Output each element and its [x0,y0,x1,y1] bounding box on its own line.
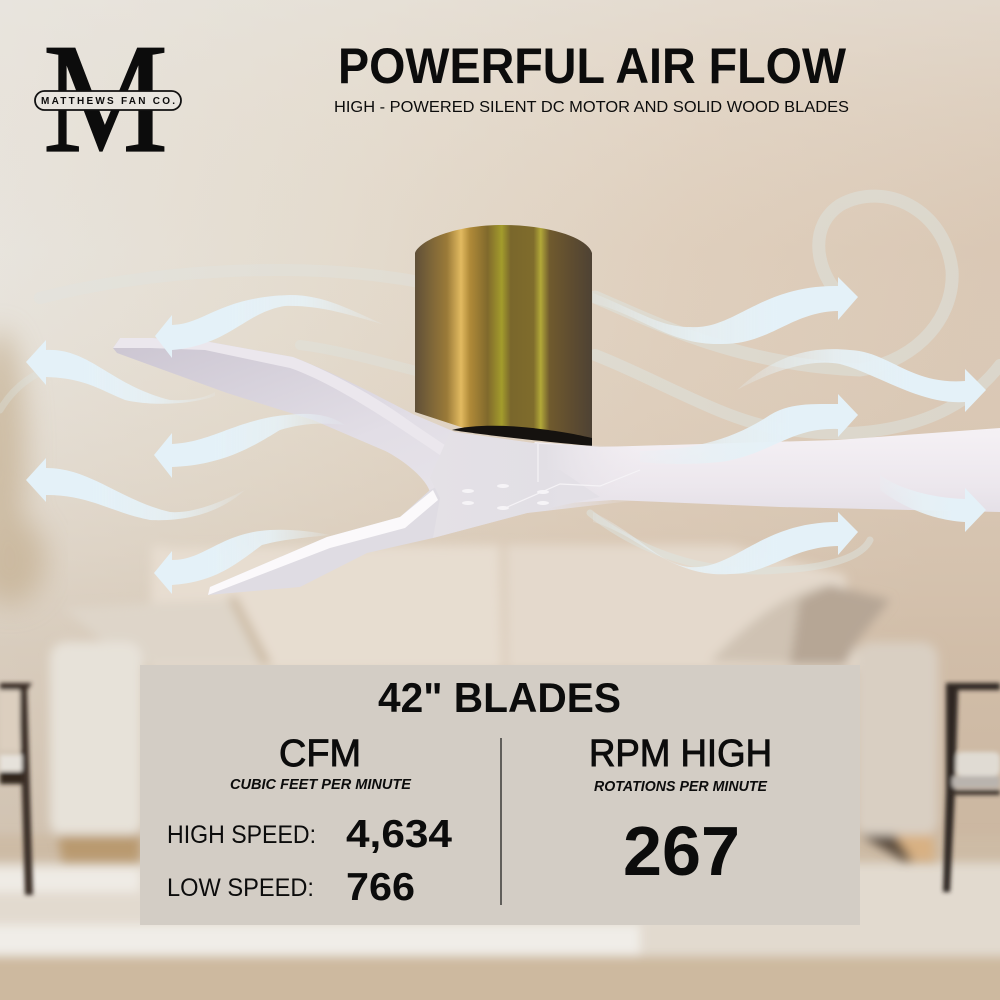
panel heading: 42" BLADES [378,674,621,721]
arrow [154,530,330,594]
blade: right [500,428,1000,512]
sofa [50,545,938,861]
arrow [880,475,986,532]
arrow [737,349,986,412]
low speed value: 766 [346,866,415,909]
low speed label: LOW SPEED: [167,874,314,902]
airflow arrows: left [26,295,385,594]
subtitle: HIGH - POWERED SILENT DC MOTOR AND SOLID WOOD BLADES [334,99,849,116]
airflow arrows: right [593,277,986,574]
hub seam [505,444,640,508]
logo: Matthews Fan Co.: M [43,11,168,185]
motor underside shadow [452,426,592,446]
arrow [640,394,858,464]
floor [0,835,1000,1000]
hub screws [462,484,549,510]
CFM subheading: CUBIC FEET PER MINUTE [230,777,412,793]
RPM heading: RPM HIGH [589,733,772,775]
arrow [26,458,245,520]
logo: Matthews Fan Co.: MATTHEWS FAN CO. [41,96,175,107]
RPM value: 267 [623,812,740,890]
title: POWERFUL AIR FLOW [338,38,847,94]
arrow [26,340,215,404]
blade: upper left [113,338,545,500]
arrow [593,277,858,344]
blade top lip [113,338,470,470]
high speed value: 4,634 [346,813,452,856]
high speed label: HIGH SPEED: [167,821,316,849]
RPM subheading: ROTATIONS PER MINUTE [594,779,768,795]
arrow [154,414,345,478]
motor housing: brass [415,225,592,446]
panel: specifications [140,665,860,925]
arrow [593,512,858,574]
blade: lower left [208,470,600,595]
faint air swirl lines behind the motor [0,196,1000,571]
arrow [155,295,385,358]
CFM heading: CFM [279,733,361,775]
side chairs [0,683,1000,895]
fan blades [113,338,1000,595]
hub [430,432,640,538]
plant at left [0,330,46,605]
